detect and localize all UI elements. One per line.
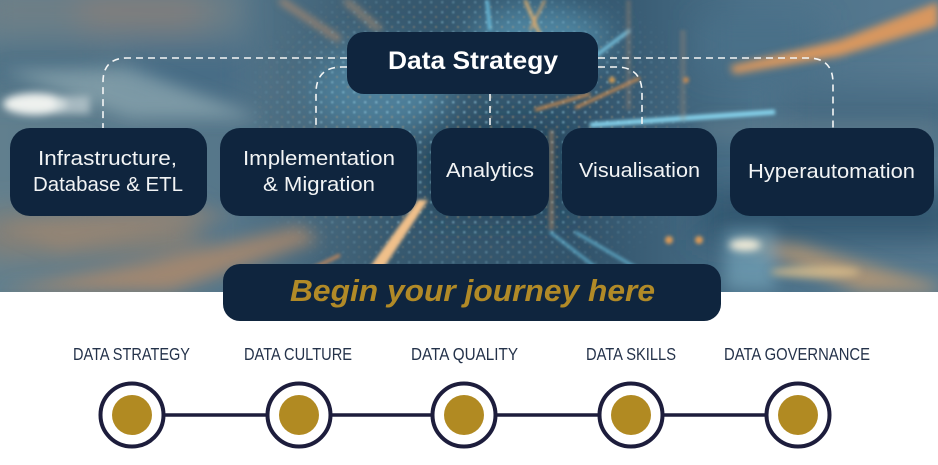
dashed connectors xyxy=(103,58,833,128)
panel: Hyperautomation xyxy=(730,128,934,216)
panel: Infrastructure, Database & ETL: Database & ETL xyxy=(33,174,183,196)
panel: Infrastructure, Database & ETL xyxy=(10,128,207,216)
panel: Implementation & Migration: Implementation xyxy=(243,148,395,170)
timeline labels xyxy=(73,344,870,364)
panel: Analytics xyxy=(431,128,549,216)
panel: Visualisation: Visualisation xyxy=(579,160,700,182)
timeline labels: DATA SKILLS xyxy=(586,344,676,364)
timeline labels: DATA QUALITY xyxy=(411,344,518,364)
panel: Visualisation xyxy=(562,128,717,216)
panel: Implementation & Migration: & Migration xyxy=(263,174,375,196)
heading: Data Strategy: Data Strategy xyxy=(388,47,558,75)
timeline labels: DATA CULTURE xyxy=(244,344,352,364)
timeline labels: DATA STRATEGY xyxy=(73,344,190,364)
banner: Begin your journey here: Begin your journey here xyxy=(290,273,655,308)
timeline with five nodes xyxy=(100,384,830,446)
timeline labels: DATA GOVERNANCE xyxy=(724,344,870,364)
panel: Implementation & Migration xyxy=(220,128,417,216)
panel: Infrastructure, Database & ETL: Infrastructure, xyxy=(38,148,177,170)
heading: Data Strategy xyxy=(347,32,598,94)
panel: Hyperautomation: Hyperautomation xyxy=(748,161,915,183)
background photo: abstract data streaks xyxy=(0,0,938,292)
banner: Begin your journey here xyxy=(223,264,721,321)
panel: Analytics: Analytics xyxy=(446,160,534,182)
